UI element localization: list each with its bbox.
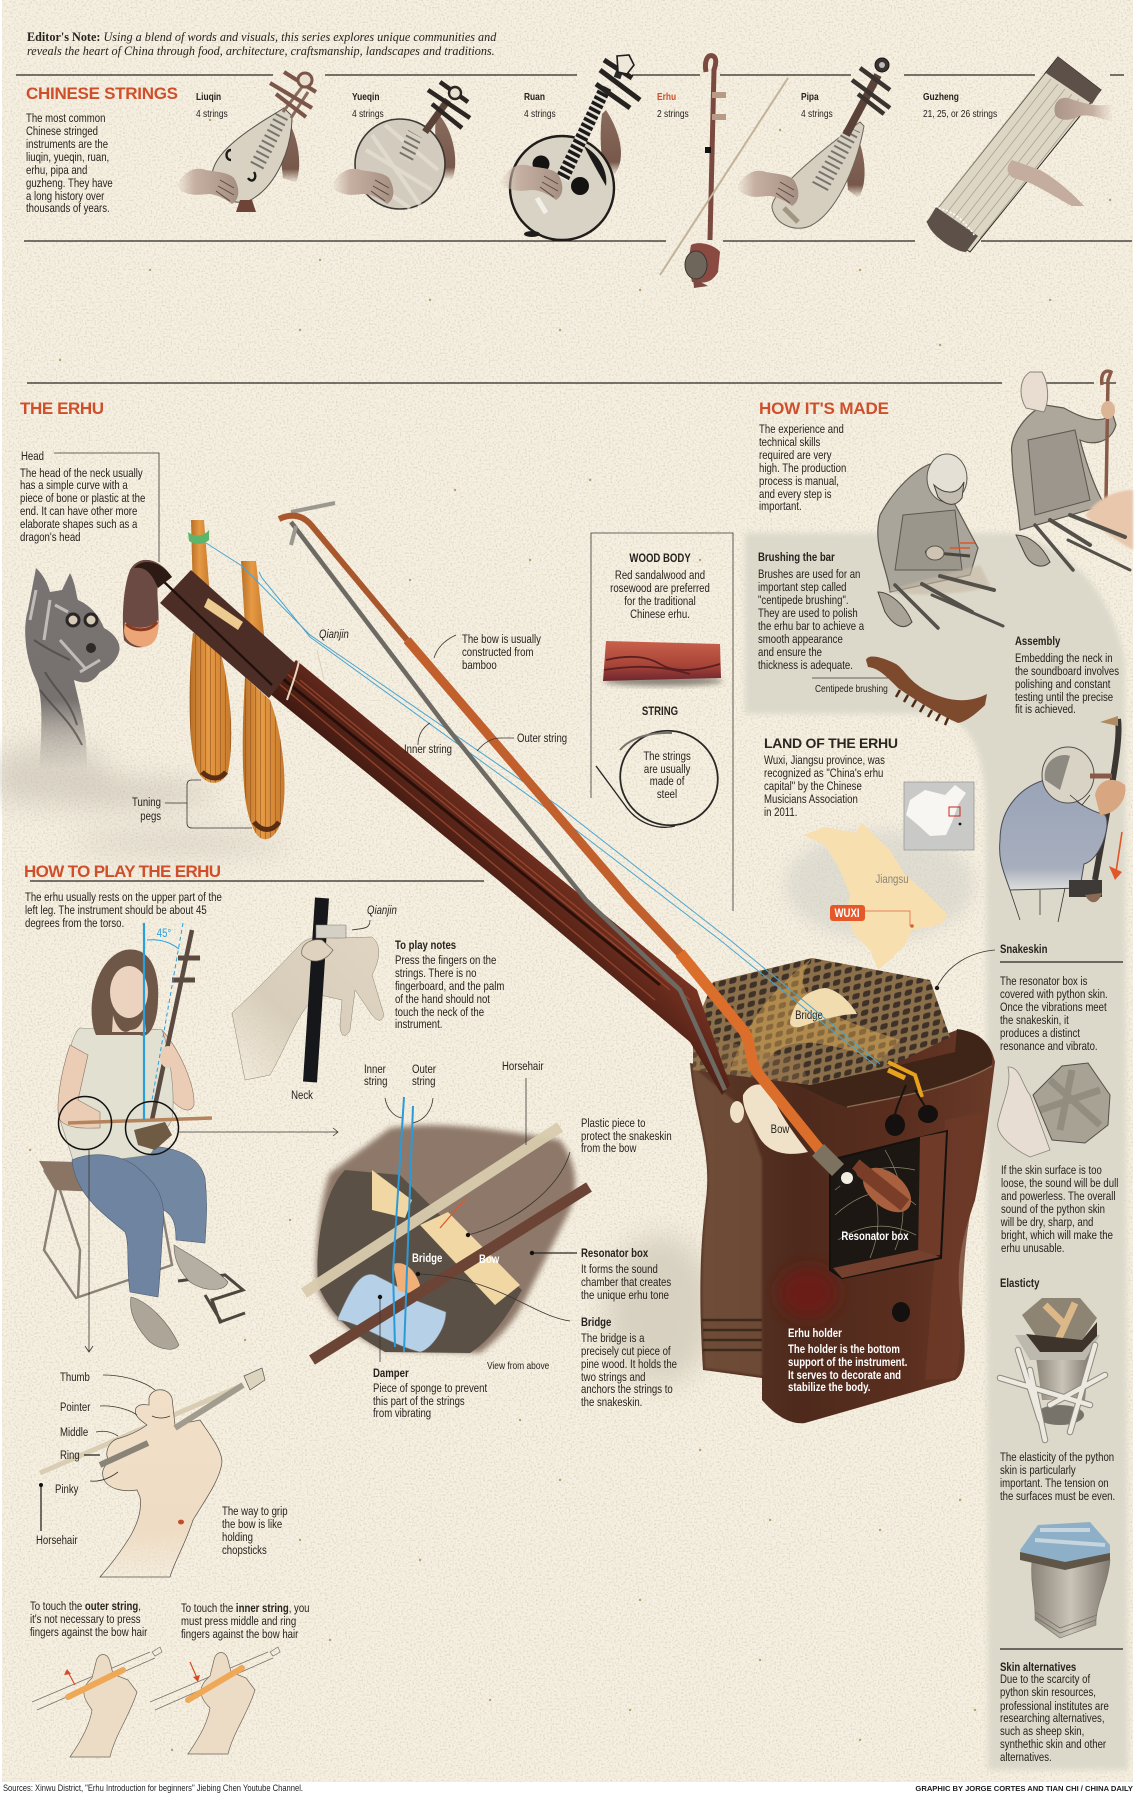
shadow beside resonator box	[605, 1235, 715, 1385]
labels: detail view: the snakeskin.	[581, 1396, 642, 1409]
illustration: woman playing erhu	[39, 923, 245, 1349]
labels: detail view: the unique erhu tone	[581, 1289, 669, 1302]
text: outer string	[30, 1600, 148, 1639]
text: outer string: To touch the outer string,	[30, 1600, 141, 1613]
text: skin alternatives: Skin alternatives	[1000, 1661, 1076, 1674]
labels: detail view: this part of the strings	[373, 1395, 465, 1408]
text: Erhu holder: stabilize the body.	[788, 1381, 870, 1394]
labels: detail view: The bridge is a	[581, 1332, 645, 1345]
text: loose skin: If the skin surface is too	[1001, 1164, 1102, 1177]
labels: detail view: protect the snakeskin	[581, 1130, 672, 1143]
text: to play notes: fingerboard, and the palm	[395, 980, 504, 993]
text: loose skin: will be dry, sharp, and	[1000, 1216, 1093, 1229]
text: land of the erhu: recognized as "China's erhu	[764, 767, 883, 780]
label: Pipa: Pipa	[801, 91, 819, 103]
label: Liuqin: Liuqin	[196, 91, 221, 103]
text: land of the erhu: in 2011.	[764, 806, 797, 819]
text: skin alternatives: alternatives.	[1000, 1751, 1052, 1764]
illustration: bow-holding hand	[40, 1368, 265, 1577]
intro text: a long history over	[26, 190, 105, 203]
text: to play notes: of the hand should not	[395, 993, 490, 1006]
labels: left hand: Qianjin	[367, 904, 397, 917]
labels: main erhu callouts: Inner string	[404, 743, 452, 756]
text: loose skin	[1000, 1164, 1118, 1255]
text: Erhu holder: Erhu holder	[788, 1327, 843, 1340]
text: how it's made intro: high. The production	[759, 462, 846, 475]
text: brushing the bar	[758, 551, 888, 695]
labels: detail view: View from above	[487, 1360, 549, 1372]
text: brushing the bar: and ensure the	[758, 646, 822, 659]
window	[830, 1131, 947, 1278]
text: inner string	[181, 1602, 310, 1641]
intro text: instruments are the	[26, 138, 108, 151]
text: brushing the bar: thickness is adequate.	[758, 659, 853, 672]
right leg	[110, 1146, 207, 1243]
text: assembly	[1015, 635, 1120, 716]
illustration: detail view from above: Bridge	[412, 1252, 442, 1265]
text: loose skin: erhu unusable.	[1001, 1242, 1064, 1255]
label: Ruan: 4 strings	[524, 108, 556, 120]
text: brushing the bar: smooth appearance	[758, 633, 843, 646]
large erhu: bow	[279, 503, 838, 1170]
labels: detail view: string	[364, 1075, 387, 1088]
snakeskin section: the snakeskin, it	[1000, 1014, 1069, 1027]
wood block	[603, 641, 723, 686]
inset map: China	[904, 782, 974, 850]
labels: main erhu callouts: constructed from	[462, 646, 533, 659]
icon: stretching the skin	[1000, 1298, 1105, 1440]
text: skin alternatives: python skin resources,	[1000, 1686, 1096, 1699]
snakeskin section: resonance and vibrato.	[1000, 1040, 1098, 1053]
label: Head: elaborate shapes such as a	[20, 518, 138, 531]
text: brushing the bar: important step called	[758, 581, 847, 594]
cord and bridge	[888, 1062, 922, 1097]
labels: main erhu callouts: Tuning	[132, 796, 161, 809]
editor's note: reveals the heart of China through food, architecture, craftsmanship, landscapes and traditions.	[27, 44, 495, 58]
label: Liuqin: 4 strings	[196, 108, 228, 120]
labels: bow hand: Horsehair	[36, 1534, 78, 1547]
arrow: to detail view	[178, 1128, 338, 1136]
text: assembly: fit is achieved.	[1015, 703, 1076, 716]
labels: detail view: Resonator box	[581, 1247, 648, 1260]
label: Yueqin: Yueqin	[352, 91, 380, 103]
text: how it's made intro: The experience and	[759, 423, 844, 436]
worker: assembly with hammer	[1000, 716, 1125, 922]
text: to play notes	[395, 939, 504, 1031]
labels: detail view: Inner	[364, 1063, 386, 1076]
text: to play notes: strings. There is no	[395, 967, 476, 980]
text: skin alternatives: professional institutes are	[1000, 1700, 1109, 1713]
intro text: guzheng. They have	[26, 177, 113, 190]
map: Jiangsu: WUXI	[834, 907, 860, 920]
labels: bow hand: Middle	[60, 1426, 88, 1439]
text: outer string: it's not necessary to press	[30, 1613, 141, 1626]
text: land of the erhu: capital" by the Chinese	[764, 780, 862, 793]
panel: wood body and string: Chinese erhu.	[630, 608, 690, 621]
text: brushing the bar: Brushes are used for an	[758, 568, 860, 581]
labels: detail view: Plastic piece to	[581, 1117, 646, 1130]
labels: detail view: two strings and	[581, 1371, 646, 1384]
label: Guzheng: Guzheng	[923, 91, 959, 103]
erhu and bow	[152, 930, 192, 1120]
labels: bow hand	[36, 1371, 288, 1557]
label: Bow: Bow	[771, 1123, 789, 1136]
panel: wood body and string: made of	[650, 775, 685, 788]
label: Erhu	[657, 91, 689, 120]
text: skin alternatives: such as sheep skin,	[1000, 1725, 1084, 1738]
panel: wood body and string: are usually	[644, 763, 691, 776]
instrument: erhu small	[660, 56, 788, 288]
label: Liuqin	[196, 91, 228, 120]
labels: bow hand: Thumb	[60, 1371, 90, 1384]
text: elasticity	[1000, 1451, 1115, 1503]
labels: detail view: chamber that creates	[581, 1276, 672, 1289]
labels: detail view: Piece of sponge to prevent	[373, 1382, 487, 1395]
illustration: hand for inner string	[150, 1647, 280, 1754]
label: Head: has a simple curve with a	[20, 479, 129, 492]
arms back	[162, 1030, 194, 1110]
heading: The erhu: THE ERHU	[20, 399, 104, 418]
panel: wood body and string	[591, 533, 733, 911]
labels: main erhu callouts: Qianjin	[319, 628, 349, 641]
intro text: liuqin, yueqin, ruan,	[26, 151, 109, 164]
labels: bow hand: the bow is like	[222, 1518, 282, 1531]
snakeskin section: Once the vibrations meet	[1000, 1001, 1107, 1014]
panel: wood body and string: WOOD BODY	[629, 552, 691, 565]
text: brushing the bar: the erhu bar to achieve a	[758, 620, 865, 633]
instrument: yueqin	[331, 82, 470, 209]
text: brushing the bar: Brushing the bar	[758, 551, 835, 564]
labels: bow hand: Ring	[60, 1449, 80, 1462]
heading: Chinese strings: CHINESE STRINGS	[26, 84, 178, 103]
labels: left hand	[291, 904, 397, 1102]
large erhu: blue strings	[206, 543, 880, 1066]
label: Guzheng: 21, 25, or 26 strings	[923, 108, 997, 120]
labels: bow hand: Pinky	[55, 1483, 79, 1496]
labels: bow hand: chopsticks	[222, 1544, 267, 1557]
text: loose skin: sound of the python skin	[1001, 1203, 1105, 1216]
labels: bow hand: Pointer	[60, 1401, 91, 1414]
worker: assembly bench	[1012, 371, 1133, 570]
label: Yueqin: 4 strings	[352, 108, 384, 120]
footrest	[178, 1275, 245, 1323]
snakeskin section: The resonator box is	[1000, 975, 1088, 988]
intro text: erhu, pipa and	[26, 164, 87, 177]
illustration: detail view from above	[304, 1097, 589, 1360]
shirt	[60, 1028, 173, 1165]
label: Pipa	[801, 91, 833, 120]
label: Yueqin	[352, 91, 384, 120]
horsehair	[291, 522, 725, 1090]
text: assembly: the soundboard involves	[1015, 665, 1120, 678]
icon: python skin on hand	[998, 1063, 1110, 1157]
text: inner string: To touch the inner string, you	[181, 1602, 310, 1615]
labels: main erhu callouts: bamboo	[462, 659, 497, 672]
labels: main erhu callouts: The bow is usually	[462, 633, 541, 646]
illustration: detail view from above: Bow	[479, 1253, 500, 1266]
label: Head: piece of bone or plastic at the	[20, 492, 145, 505]
labels: main erhu callouts	[132, 628, 567, 828]
arrow: hammer direction	[1109, 832, 1122, 880]
hair	[92, 949, 158, 1036]
text: brushing the bar: "centipede brushing".	[758, 594, 849, 607]
text: loose skin: and powerless. The overall	[1001, 1190, 1115, 1203]
text: loose skin: bright, which will make the	[1001, 1229, 1113, 1242]
text: Erhu holder: support of the instrument.	[788, 1356, 907, 1369]
text: how it's made intro: important.	[759, 500, 802, 513]
instrument: ruan	[500, 55, 640, 240]
section rules: instruments row	[16, 75, 1132, 383]
large erhu: head curl	[123, 560, 172, 647]
label: Erhu: 2 strings	[657, 108, 689, 120]
tools	[895, 576, 1003, 628]
snakeskin section: covered with python skin.	[1000, 988, 1108, 1001]
panel: wood body and string: Red sandalwood and	[615, 569, 705, 582]
text: inner string: fingers against the bow hair	[181, 1628, 299, 1641]
labels: detail view: It forms the sound	[581, 1263, 658, 1276]
shaded panel: how it's made and snakeskin column	[745, 533, 1128, 1770]
panel: wood body and string: rosewood are preferred	[610, 582, 710, 595]
labels: detail view: Damper	[373, 1367, 409, 1380]
text: to play notes: instrument.	[395, 1018, 442, 1031]
heading: land of the erhu: LAND OF THE ERHU	[764, 735, 898, 751]
label: Bridge: Bridge	[795, 1009, 823, 1022]
heading: elasticity: Elasticty	[1000, 1277, 1039, 1290]
frog	[818, 1150, 838, 1170]
text: how to play intro: left leg. The instrument should be about 45	[25, 904, 207, 917]
labels: detail view: anchors the strings to	[581, 1383, 673, 1396]
text: land of the erhu	[764, 754, 885, 819]
text: skin alternatives	[1000, 1649, 1123, 1764]
intro text: Chinese stringed	[26, 125, 98, 138]
text: elasticity: the surfaces must be even.	[1000, 1490, 1115, 1503]
label: Erhu: Erhu	[657, 91, 676, 103]
editor's note	[27, 30, 497, 58]
label: Ruan: Ruan	[524, 91, 545, 103]
icon: carved dragon head	[25, 568, 120, 770]
snakeskin top	[693, 958, 950, 1085]
text: assembly: Embedding the neck in	[1015, 652, 1113, 665]
intro text: thousands of years.	[26, 202, 110, 215]
holes	[885, 1114, 905, 1136]
icon: centipede brush	[866, 657, 987, 725]
panel: wood body and string: STRING	[642, 705, 678, 718]
text: how it's made intro: and every step is	[759, 488, 832, 501]
panel: wood body and string: steel	[657, 788, 677, 801]
instrument: guzheng	[927, 57, 1113, 252]
heading: how it's made: HOW IT'S MADE	[759, 399, 889, 418]
large erhu: resonator box	[690, 958, 995, 1423]
text: outer string: fingers against the bow hair	[30, 1626, 148, 1639]
map: Jiangsu	[785, 823, 975, 970]
panel: wood body and string: for the traditional	[624, 595, 696, 608]
heading: how to play: HOW TO PLAY THE ERHU	[24, 862, 221, 881]
editor's note: Editor's Note: Using a blend of words and visuals, this series explores unique communities and	[27, 30, 497, 44]
snakeskin section: produces a distinct	[1000, 1027, 1080, 1040]
left leg	[72, 1155, 164, 1297]
labels: main erhu callouts: Outer string	[517, 732, 567, 745]
text: skin alternatives: synthethic skin and other	[1000, 1738, 1106, 1751]
panel: wood body and string: The strings	[643, 750, 691, 763]
snakeskin section: Snakeskin	[1000, 943, 1047, 956]
label: Head: Head	[21, 450, 44, 463]
intro text	[26, 112, 113, 215]
text: elasticity: The elasticity of the python	[1000, 1451, 1114, 1464]
text: how it's made intro	[759, 423, 846, 513]
illustration: left hand on neck	[232, 898, 384, 1082]
labels: detail view: Bridge	[581, 1316, 611, 1329]
text: loose skin: loose, the sound will be dull	[1001, 1177, 1118, 1190]
text: Erhu holder	[788, 1327, 907, 1394]
label: Head	[20, 450, 159, 562]
labels: detail view	[364, 1060, 677, 1420]
text: to play notes: touch the neck of the	[395, 1006, 484, 1019]
label: Guzheng	[923, 91, 997, 120]
labels: detail view: from the bow	[581, 1142, 637, 1155]
label: Pipa: 4 strings	[801, 108, 833, 120]
credit: GRAPHIC BY JORGE CORTES AND TIAN CHI / CHINA DAILY	[915, 1784, 1133, 1793]
labels: detail view: Horsehair	[502, 1060, 544, 1073]
labels: detail view: Outer	[412, 1063, 436, 1076]
label: Ruan	[524, 91, 556, 120]
text: how to play intro	[25, 891, 222, 930]
label: Head: The head of the neck usually	[20, 467, 143, 480]
text: brushing the bar: They are used to polish	[758, 607, 858, 620]
label: Resonator box: Resonator box	[841, 1230, 909, 1243]
text: how to play intro: degrees from the torso.	[25, 917, 124, 930]
labels: detail view: precisely cut piece of	[581, 1345, 671, 1358]
string coil	[596, 717, 731, 839]
text: assembly: Assembly	[1015, 635, 1060, 648]
text: land of the erhu: Musicians Association	[764, 793, 858, 806]
text: to play notes: Press the fingers on the	[395, 954, 496, 967]
text: Erhu holder: It serves to decorate and	[788, 1369, 901, 1382]
labels: main erhu callouts: pegs	[140, 810, 162, 823]
worker: brushing the bar	[878, 454, 1003, 628]
text: brushing the bar: Centipede brushing	[815, 683, 888, 695]
map: Jiangsu: Jiangsu	[875, 873, 909, 886]
stool	[44, 1170, 172, 1298]
text: how to play intro: The erhu usually rests on the upper part of the	[25, 891, 222, 904]
stick	[279, 516, 407, 640]
snakeskin section	[935, 943, 1123, 1053]
large erhu: neck	[160, 570, 730, 1095]
label: Head: end. It can have other more	[20, 505, 137, 518]
text: elasticity: important. The tension on	[1000, 1477, 1109, 1490]
zoom circles	[58, 1096, 112, 1150]
source note: Sources: Xinwu District, "Erhu Introduction for beginners" Jiebing Chen Youtube Channel.	[3, 1783, 303, 1793]
text: Erhu holder: The holder is the bottom	[788, 1343, 900, 1356]
intro text: The most common	[26, 112, 105, 125]
labels: detail view: from vibrating	[373, 1407, 431, 1420]
instrument: pipa	[736, 58, 890, 228]
large erhu: tuning pegs	[188, 520, 285, 839]
labels: detail view: string	[412, 1075, 435, 1088]
labels: left hand: Neck	[291, 1089, 313, 1102]
rim	[793, 1029, 992, 1107]
text: land of the erhu: Wuxi, Jiangsu province, was	[764, 754, 885, 767]
text: how it's made intro: required are very	[759, 449, 832, 462]
labels: detail view: pine wood. It holds the	[581, 1358, 677, 1371]
text: skin alternatives: Due to the scarcity of	[1000, 1673, 1091, 1686]
blue reference lines	[143, 923, 145, 1120]
labels: bow hand: The way to grip	[222, 1505, 288, 1518]
text: inner string: must press middle and ring	[181, 1615, 296, 1628]
instrument: liuqin	[176, 72, 316, 212]
arrow: to bow hand	[85, 1150, 93, 1352]
icon: synthetic skin box	[1020, 1522, 1110, 1638]
text: how it's made intro: process is manual,	[759, 475, 839, 488]
bow tip	[836, 1168, 858, 1188]
text: assembly: polishing and constant	[1015, 678, 1110, 691]
label: Head: dragon's head	[20, 531, 81, 544]
text: to play notes: To play notes	[395, 939, 456, 952]
text: elasticity: skin is particularly	[1000, 1464, 1076, 1477]
illustration: woman playing erhu: 45°	[157, 927, 171, 940]
illustration: hand for outer string	[32, 1647, 162, 1757]
text: skin alternatives: researching alternatives,	[1000, 1712, 1105, 1725]
labels: bow hand: holding	[222, 1531, 253, 1544]
box body	[690, 1030, 995, 1423]
text: assembly: testing until the precise	[1015, 691, 1113, 704]
shadow under tuning pegs	[0, 744, 290, 853]
text: how it's made intro: technical skills	[759, 436, 821, 449]
